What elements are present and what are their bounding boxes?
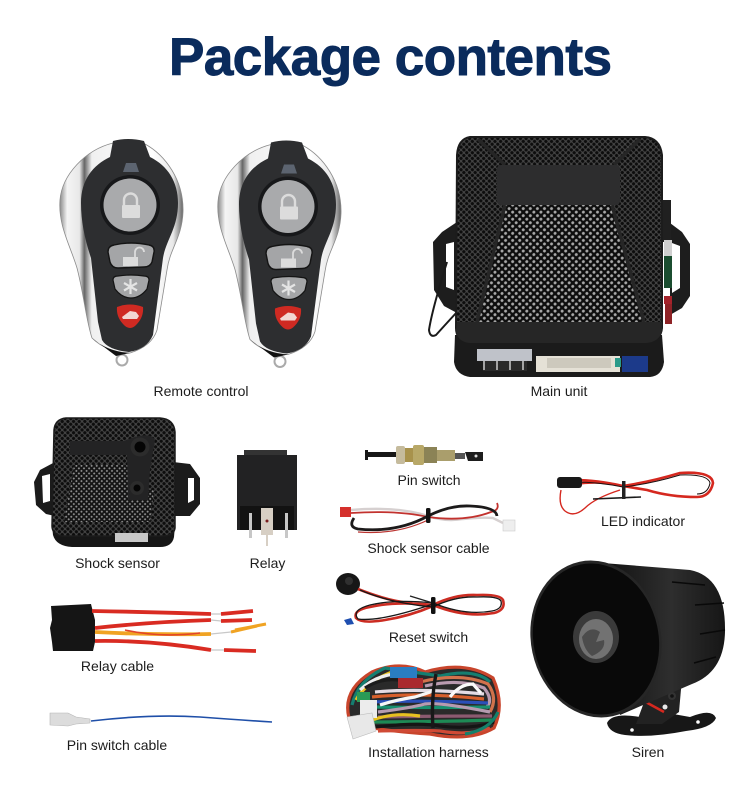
cylinder body xyxy=(590,562,725,715)
label: shock sensor cable: Shock sensor cable xyxy=(367,540,490,556)
reset switch xyxy=(336,573,504,645)
title: Package contents xyxy=(169,28,612,87)
label: pin switch: Pin switch xyxy=(397,472,461,488)
icon: first remote fob xyxy=(60,139,183,366)
shock sensor cable xyxy=(340,503,515,556)
pin switch cable xyxy=(50,713,272,753)
base xyxy=(52,525,175,547)
mesh lid xyxy=(456,137,662,341)
mesh lid xyxy=(52,418,175,536)
siren xyxy=(516,548,725,760)
connector block xyxy=(50,604,95,651)
mesh window xyxy=(64,465,154,522)
cable loop xyxy=(429,262,457,336)
LED indicator xyxy=(557,473,713,529)
label: siren: Siren xyxy=(632,744,664,760)
mesh centre xyxy=(477,205,644,322)
connectors on harness xyxy=(390,667,417,678)
shock sensor xyxy=(34,418,200,571)
base xyxy=(454,335,664,377)
icon: second remote fob xyxy=(218,140,341,367)
speaker centre xyxy=(573,611,619,663)
label: relay: Relay xyxy=(250,555,285,571)
connector xyxy=(115,533,148,542)
mounting bracket xyxy=(607,712,716,736)
side connectors xyxy=(662,200,672,324)
label plate xyxy=(497,165,620,205)
label: LED indicator: LED indicator xyxy=(601,513,685,529)
installation harness xyxy=(347,666,499,760)
cable tie xyxy=(432,674,436,728)
label: installation harness: Installation harness xyxy=(368,744,489,760)
label: pin switch cable: Pin switch cable xyxy=(67,737,167,753)
bottom connectors xyxy=(477,349,648,372)
wire bundle xyxy=(348,666,499,737)
mounting ears xyxy=(433,222,457,313)
mounting ears xyxy=(34,462,55,516)
horn mouth xyxy=(516,548,676,730)
plate and screw holes xyxy=(70,435,155,500)
label: reset switch: Reset switch xyxy=(389,629,468,645)
red and yellow wires xyxy=(92,611,211,614)
lid ribs xyxy=(477,139,644,322)
label: remote control: Remote control xyxy=(154,383,248,399)
label: main unit: Main unit xyxy=(531,383,588,399)
label: relay cable: Relay cable xyxy=(81,658,154,674)
remote control xyxy=(60,139,341,399)
main unit xyxy=(429,137,690,399)
label: shock sensor: Shock sensor xyxy=(75,555,160,571)
relay xyxy=(237,450,297,571)
pin switch xyxy=(365,445,483,488)
relay cable xyxy=(50,604,266,674)
